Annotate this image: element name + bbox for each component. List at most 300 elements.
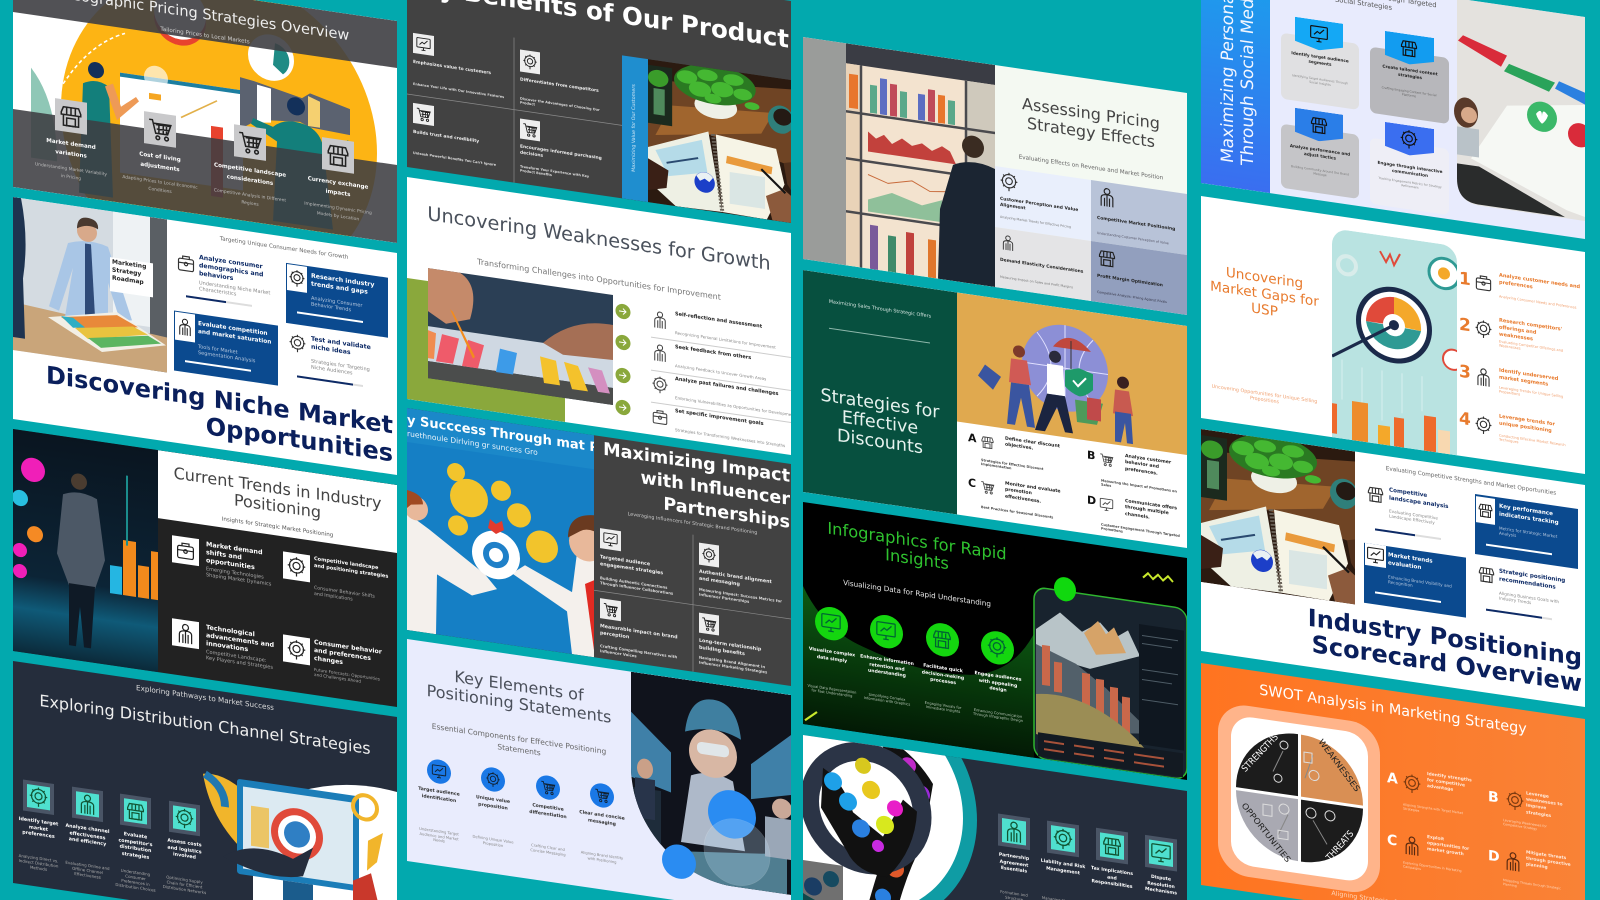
item 1: analyze customer needs: [1459, 267, 1585, 329]
banner subtext: ruethnoule Dirlving gr suncess Gro: [407, 429, 538, 457]
item: differentiates: [520, 50, 600, 112]
item: builds trust: [413, 102, 496, 167]
photo: notebook on wooden desk: [1201, 429, 1355, 604]
cell text: Customer Perception and Value Alignment: [1000, 197, 1078, 213]
item: identify target market: [18, 780, 58, 872]
item note: Conducting Effective Market Research Techniques: [1499, 433, 1566, 447]
heading: Industry Positioning: [1308, 604, 1582, 672]
item text: Exploit opportunities for market growth: [1427, 835, 1469, 858]
item note: Analyzing Direct vs. Indirect Distribution Methods: [19, 853, 58, 872]
item note: Future Forecasts: Opportunities and Challenges Ahead: [314, 667, 380, 684]
cell text: Demand Elasticity Considerations: [1000, 258, 1083, 275]
panel: Discovering Niche Market Opportunities slide: [13, 197, 397, 475]
chart: SWOT quadrant pie: OPPORTUNITIES: [1239, 802, 1292, 865]
cell: competitive market: [1091, 180, 1187, 255]
heading: [1218, 0, 1258, 167]
item note: Strategies for Transforming Weaknesses into Strengths: [675, 427, 785, 448]
side bar caption: Maximizing Value for Our Customers: [632, 84, 637, 172]
photo: notebook on wooden desk: [648, 59, 791, 223]
item: evaluate competitors: [115, 794, 156, 893]
card: research industry: [286, 263, 388, 338]
chart: SWOT quadrant pie: THREATS: [1324, 829, 1356, 864]
item text: Communicate offers through multiple channels.: [1125, 499, 1177, 520]
icon: chess piece: [1503, 848, 1523, 875]
photo: woman with helmet in control room: [631, 672, 791, 895]
panel: Partnership legal essentials slide: [803, 735, 1187, 900]
heading: Current Trends in Industry Positioning: [174, 463, 381, 522]
item letter: C: [968, 476, 976, 490]
card text: Test and validate niche ideas: [311, 335, 371, 356]
item note: Recognizing Personal Limitations for Improvement: [675, 330, 776, 350]
icon: gear: [699, 543, 719, 568]
heading: Market Gaps for: [1210, 278, 1319, 310]
zigzag accent: [1143, 570, 1173, 586]
card text: Market trends evaluation: [1388, 552, 1433, 571]
letter: B: [1488, 789, 1499, 806]
item text: Research competitors' offerings and weaknesses: [1499, 317, 1562, 342]
item note: Strategies for Effective Discount Implementation: [981, 458, 1043, 471]
item note: Enhancing Communication Through Infographic Design: [973, 708, 1023, 724]
subtitle: Exploring Pathways to Market Success: [136, 683, 274, 712]
title band: [13, 0, 397, 68]
card text: Evaluate competition: [198, 321, 268, 337]
item text: Encourages informed purchasing decisions: [520, 144, 602, 161]
item: communicate offers: [1087, 490, 1187, 547]
item text: Tax Implications and Responsibilities: [1091, 866, 1133, 890]
item: monitor effectiveness: [968, 473, 1078, 531]
panel: Key Benefits of Our Product slide: [407, 0, 791, 223]
number: 4: [1459, 409, 1471, 430]
card: identify target audience: [1281, 16, 1359, 110]
item: self-reflection: [651, 305, 791, 358]
item note: Unleash Powerful Benefits You Can't Ignore: [413, 151, 496, 167]
item note: Visual Data Representation for Fast Understanding: [808, 684, 856, 699]
icon: monitor: [1099, 496, 1114, 513]
item text: Authentic brand alignment and messaging: [699, 570, 772, 587]
illustration: target and bar chart: [1332, 228, 1457, 455]
grid lines: [407, 38, 622, 182]
icon: gear: [1366, 481, 1385, 508]
subtitle: Evaluating Effects on Revenue and Market Position: [1019, 154, 1163, 182]
item: measurable impact: [600, 598, 678, 659]
step markers: [616, 304, 630, 416]
item: currency exchange: [304, 137, 372, 222]
item note: Building Authentic Connections Through Influencer Collaborations: [600, 575, 673, 596]
item A: identify strengths: [1387, 766, 1477, 829]
item note: Aligning Brand Identity with Positioning: [581, 850, 623, 864]
item: encourages decisions: [520, 118, 602, 179]
tag icon: [1295, 108, 1343, 145]
subtitle: Uncovering Opportunities for Unique Selling Propositions: [1212, 385, 1317, 405]
heading: [803, 384, 957, 463]
item letter: A: [968, 431, 977, 445]
item text: Analyze past failures and challenges: [675, 376, 778, 397]
heading: Discounts: [837, 426, 923, 458]
icon: cart: [1099, 451, 1114, 468]
progress bar: [186, 295, 252, 307]
icon: teal tile: [998, 813, 1030, 850]
subtitle: Maximizing Sales Through Strategic Offers: [829, 300, 931, 320]
letter: D: [1488, 848, 1500, 866]
icon: bag: [178, 255, 194, 272]
item text: Facilitate quick decision-making processes: [922, 664, 964, 686]
item text: Identify underserved market segments: [1499, 367, 1558, 388]
illustration: analysts with telescope on yellow circle: [31, 0, 377, 236]
icon: store: [1477, 561, 1496, 588]
gradient side bar: [1201, 0, 1270, 193]
icon: store: [322, 137, 354, 174]
item note: Navigating Brand Alignment in Influencer Marketing Strategies: [699, 655, 767, 674]
item text: Evaluate competitor's distribution strategies: [118, 832, 153, 860]
item: dispute resolution: [1138, 834, 1184, 900]
item text: Competitive landscape and positioning strategies: [314, 556, 388, 580]
panel: Infographics for Rapid Insights slide: [803, 502, 1187, 780]
icon: man: [175, 312, 195, 343]
heading: Strategy Effects: [1027, 114, 1155, 151]
item text: Analyze customer needs and preferences: [1499, 272, 1580, 290]
card: key performance indicators: [1475, 494, 1578, 569]
card note: Crafting Engaging Content for Social Platforms: [1382, 85, 1436, 98]
cell: profit margin: [1091, 241, 1187, 315]
icon: bag: [1474, 272, 1493, 294]
card note: Tools for Market Segmentation Analysis: [198, 344, 255, 365]
item: assess costs: [163, 800, 206, 895]
item: targeted audience: [600, 528, 673, 596]
icon: green circle: [926, 621, 959, 659]
icon: gear: [1402, 771, 1422, 796]
card note: Tracking Engagement Metrics for Strategy Refinement: [1378, 176, 1442, 190]
item note: Analyzing Consumer Needs and Preferences: [1499, 294, 1576, 310]
item text: Enhance information retention and understanding: [860, 654, 914, 679]
icon: cart: [980, 479, 995, 496]
heading: Key Elements of: [454, 667, 584, 705]
cell: customer perception: [995, 166, 1091, 241]
panel: Assessing Pricing Strategy Effects slide: [803, 37, 1187, 315]
panel: Maximizing Personalization Through Social Media slide: [1201, 0, 1585, 239]
heading: [1201, 589, 1582, 697]
icon: man: [1000, 230, 1016, 256]
subtitle: Transforming Challenges into Opportunities for Improvement: [477, 257, 721, 302]
heading: [407, 661, 631, 730]
card note: Enhancing Brand Visibility and Recognition: [1388, 574, 1452, 589]
card text: Analyze consumer demographics and behaviors: [199, 254, 263, 282]
green accent block: [407, 278, 565, 422]
item text: Identify target market preferences: [19, 817, 58, 840]
icon: gear: [283, 634, 310, 665]
letter: C: [1387, 832, 1397, 850]
item note: Competitive Landscape: Key Players and Strategies: [206, 649, 273, 671]
icon: green circle: [815, 605, 848, 643]
item note: Understanding Consumer Preferences in Distribution Choices: [115, 868, 156, 893]
item text: Set specific improvement goals: [675, 408, 764, 427]
item note: Measuring the Impact of Promotions on Sales: [1101, 478, 1177, 494]
icon: chess piece: [1097, 184, 1117, 211]
subtitle: Essential Components for Effective Positioning: [432, 722, 606, 756]
subtitle: Visualizing Data for Rapid Understanding: [843, 578, 991, 608]
item note: Crafting Clear and Concise Messaging: [530, 843, 566, 857]
subtitle: [407, 717, 631, 772]
heading: Insights: [885, 545, 949, 573]
icon: blue circle: [590, 782, 614, 809]
card background: [1370, 47, 1449, 124]
icon: people: [654, 344, 666, 362]
icon: bag: [172, 535, 199, 566]
icon: blue circle: [427, 758, 451, 785]
item text: Monitor and evaluate promotion effectiveness.: [1005, 481, 1061, 504]
tag icon: [1385, 122, 1434, 159]
icon: man: [172, 618, 199, 649]
item: competitive landscape: [283, 551, 388, 602]
item text: Dispute Resolution Mechanisms: [1145, 875, 1177, 897]
tag icon: [1295, 17, 1343, 54]
item note: Crafting Compelling Narratives with Influencer Voices: [600, 643, 677, 659]
banner text: y Succcess Through mat P: [407, 413, 594, 456]
number: 3: [1459, 362, 1471, 383]
item: unique value: [467, 764, 519, 861]
item letter: B: [1087, 448, 1095, 463]
chart: SWOT quadrant pie: [1218, 701, 1380, 896]
illustration: hands exchanging gold coins: [407, 408, 594, 658]
item text: Emphasizes value to customers: [413, 60, 491, 76]
divider: [829, 328, 930, 344]
item: set improvement goals: [652, 408, 785, 448]
icon: teal tile: [1145, 835, 1177, 872]
subtitle: Statements: [497, 742, 541, 758]
icon: blue circle: [481, 766, 505, 793]
card text: Create tailored content strategies: [1382, 63, 1438, 80]
item text: Self-reflection and assessment: [675, 311, 762, 330]
panel: Industry Positioning Scorecard Overview slide: [1201, 429, 1585, 707]
item note: Exploring Opportunities in Marketing Campaigns: [1403, 860, 1462, 873]
panel: Uncovering Weaknesses for Growth slide: [407, 177, 791, 455]
chart: SWOT quadrant pie: STRENGTHS: [1240, 732, 1281, 775]
panel: Exploring Distribution Channel Strategies slide: [13, 661, 397, 900]
item: technological advancements: [172, 618, 274, 671]
icon: teal tile: [72, 787, 103, 822]
photo: man at roadmap table: [13, 197, 167, 372]
card note: Understanding Niche Market Characteristics: [199, 280, 270, 298]
photo: man viewing chart wall: [846, 43, 995, 287]
card: test and validate: [290, 334, 371, 387]
icon: cart: [520, 118, 540, 141]
item text: Currency exchange impacts: [308, 176, 368, 198]
icon: teal tile: [169, 801, 200, 836]
item note: Defining Unique Value Proposition: [473, 835, 513, 848]
heading: Assessing Pricing: [1022, 94, 1160, 133]
progress bar: [1486, 609, 1552, 620]
icon: gear: [520, 49, 540, 74]
item text: Define clear discount objectives.: [1005, 436, 1060, 452]
item note: Leveraging Trends for Unique Selling Propositions: [1499, 385, 1563, 399]
heading: Uncovering Weaknesses for Growth: [427, 202, 771, 275]
icon: gear: [1474, 317, 1493, 342]
icon: gear: [999, 169, 1019, 196]
item: competitive landscape: [214, 124, 286, 207]
green wave background: [803, 502, 1187, 780]
heading: Uncovering: [1226, 265, 1303, 292]
item note: Analyzing Feedback to Uncover Growth Areas: [675, 363, 766, 381]
item note: Aligning Strengths with Target Market Strategies: [1403, 802, 1463, 815]
item note: Evaluating Online and Offline Channel Effectiveness: [65, 860, 110, 880]
panel: Current Trends in Industry Positioning slide: [13, 429, 397, 707]
item: analyze channel: [65, 786, 110, 880]
item note: Engaging Visuals for Immediate Insights: [925, 701, 961, 714]
item text: Target audience identification: [418, 787, 460, 804]
grey side strip: [803, 37, 846, 265]
card note: Analyzing Consumer Behavior Trends: [311, 295, 362, 314]
item note: Understanding Target Audience and Market Needs: [419, 827, 459, 844]
item text: Competitive landscape considerations: [214, 162, 286, 186]
icon: gear: [283, 551, 310, 582]
item text: Differentiates from competitors: [520, 77, 599, 94]
item: target audience: [413, 756, 465, 853]
progress bar: [297, 375, 363, 387]
cell note: Understanding Customer Perception of Value: [1097, 231, 1169, 245]
lower band: [13, 109, 397, 243]
progress bar: [1375, 591, 1441, 603]
illustration: shoppers and globe: [957, 292, 1187, 455]
icon: man: [1402, 832, 1422, 859]
item note: Leveraging Weaknesses for Competitive Strategy: [1503, 818, 1547, 831]
item: competitive differentiation: [522, 772, 574, 869]
card note: Building Community Around the Brand Message: [1291, 164, 1349, 177]
subtitle: Insights for Strategic Market Positioning: [222, 516, 333, 539]
card: market trends: [1364, 543, 1466, 618]
item text: Market demand variations: [46, 138, 96, 159]
icon: gear: [652, 376, 668, 394]
card: evaluate competition: [174, 310, 278, 386]
item note: Customer Engagement Through Targeted Promotions: [1101, 522, 1180, 538]
card text: Competitive landscape analysis: [1389, 487, 1449, 510]
item note: Mitigating Threats through Strategic Planning: [1503, 878, 1561, 891]
progress bar: [1375, 528, 1441, 540]
icon: cart: [699, 613, 719, 636]
card text: Research industry trends and gaps: [311, 272, 374, 296]
card text: Analyze performance and adjust tactics: [1290, 143, 1350, 161]
decorative green dot: [1054, 576, 1076, 603]
card background: [1370, 138, 1449, 215]
item: market demand shifts: [172, 535, 272, 588]
item: market demand: [35, 98, 107, 181]
icon: cart: [413, 103, 434, 126]
heading: [1201, 261, 1328, 328]
icon: green circle: [981, 629, 1014, 667]
green side panel: [803, 270, 957, 514]
item note: Adapting Prices to Local Economic Conditions: [122, 175, 198, 195]
card text: Strategic positioning recommendations: [1499, 568, 1565, 591]
chart: 3D mountain data dashboard: [1034, 584, 1187, 780]
icon: monitor: [413, 33, 434, 56]
item D: mitigate threats: [1488, 842, 1578, 900]
heading: Positioning Statements: [427, 681, 611, 727]
icon: teal tile: [23, 779, 54, 815]
item: cost of living: [122, 111, 198, 195]
item: enhance retention: [860, 611, 914, 729]
progress bar: [185, 360, 251, 372]
item text: Partnership Agreement Essentials: [999, 853, 1029, 875]
item letter: D: [1087, 493, 1096, 508]
item text: Targeted audience engagement strategies: [600, 555, 663, 576]
card: strategic positioning: [1475, 559, 1578, 634]
item C: exploit opportunities: [1387, 827, 1477, 890]
item text: Identify strengths for competitive advantage: [1427, 772, 1472, 793]
item text: Builds trust and credibility: [413, 130, 479, 145]
item text: Liability and Risk Management: [1041, 859, 1085, 876]
item note: Competitive Analysis in Different Regions: [214, 188, 286, 207]
item note: Measuring Impact: Success Metrics for Influencer Partnerships: [699, 587, 782, 604]
item 4: leverage trends: [1459, 408, 1585, 470]
panel: SWOT Analysis in Marketing Strategy slide: [1201, 663, 1585, 900]
sign: marketing strategy roadmap: [110, 257, 153, 297]
card background: [1281, 33, 1359, 110]
photo: man facing neon data wall: [13, 429, 158, 672]
item: long-term relationship: [699, 613, 789, 686]
item text: Long-term relationship building benefits: [699, 639, 761, 657]
item text: Analyze customer behavior and preferences.: [1125, 454, 1171, 476]
item: engage audiences: [971, 628, 1025, 745]
item: consumer behavior: [283, 634, 382, 684]
title area: [158, 450, 397, 553]
item text: Assess costs and logistics involved: [167, 839, 202, 861]
card note: Aligning Business Goals with Industry Trends: [1499, 590, 1559, 605]
panel: Key Elements of Positioning Statements slide: [407, 639, 791, 900]
item: emphasizes value: [413, 32, 504, 99]
item text: Leverage weaknesses to improve strategies: [1526, 791, 1562, 819]
item note: Optimizing Supply Chain for Efficient Distribution Networks: [163, 874, 206, 895]
heading: SWOT Analysis in Marketing Strategy: [1259, 682, 1527, 738]
item note: Emerging Technologies Shaping Market Dynamics: [206, 566, 271, 588]
item: liability and risk: [1040, 820, 1086, 900]
panel: Maximizing Impact with Influencer Partnerships slide: [407, 408, 791, 686]
item text: Mitigate threats through proactive planning: [1526, 850, 1571, 871]
icon: gear: [287, 264, 307, 293]
icon: store: [980, 434, 995, 451]
card text: [198, 320, 271, 346]
subtitle: [1270, 0, 1457, 22]
icon: document: [1097, 244, 1117, 273]
heading: [803, 516, 1031, 585]
heading: Exploring Distribution Channel Strategies: [39, 691, 371, 758]
heading: USP: [1251, 300, 1278, 320]
subtitle: Targeting Unique Consumer Needs for Growth: [220, 236, 348, 261]
item note: Best Practices for Seasonal Discounts: [981, 505, 1053, 520]
heading: Strategies for: [820, 386, 940, 423]
item text: Technological advancements and innovations: [206, 623, 274, 653]
icon: monitor: [600, 528, 621, 551]
item note: Consumer Behavior Shifts and Implications: [314, 586, 375, 602]
chart: SWOT quadrant pie: WEAKNESSES: [1316, 738, 1361, 794]
item: authentic brand: [699, 542, 782, 604]
item text: Consumer behavior and preferences changes: [314, 639, 382, 666]
item note: Implementing Dynamic Pricing Models by Location: [304, 201, 372, 222]
card text: Identify target audience segments: [1291, 50, 1349, 67]
item: analyze past failures: [651, 370, 791, 423]
item text: Market demand shifts and opportunities: [206, 540, 263, 571]
card note: Evaluating Competitive Landscape Effectively: [1389, 508, 1438, 525]
card: analyze consumer: [178, 254, 270, 307]
sign: marketing strategy roadmap: Marketing Strategy Roadmap: [112, 258, 146, 286]
letter: A: [1387, 770, 1398, 788]
illustration: rainbow gear handshake: [803, 735, 1187, 900]
heading: [995, 90, 1187, 156]
icon: gear: [1474, 413, 1493, 438]
item 3: identify underserved: [1459, 362, 1585, 424]
number: 1: [1459, 269, 1471, 290]
icon: gear: [1505, 787, 1525, 814]
item: tax implications: [1089, 827, 1135, 900]
number: 2: [1459, 315, 1471, 336]
cell note: Analyzing Market Trends for Effective Pricing: [1000, 215, 1071, 229]
